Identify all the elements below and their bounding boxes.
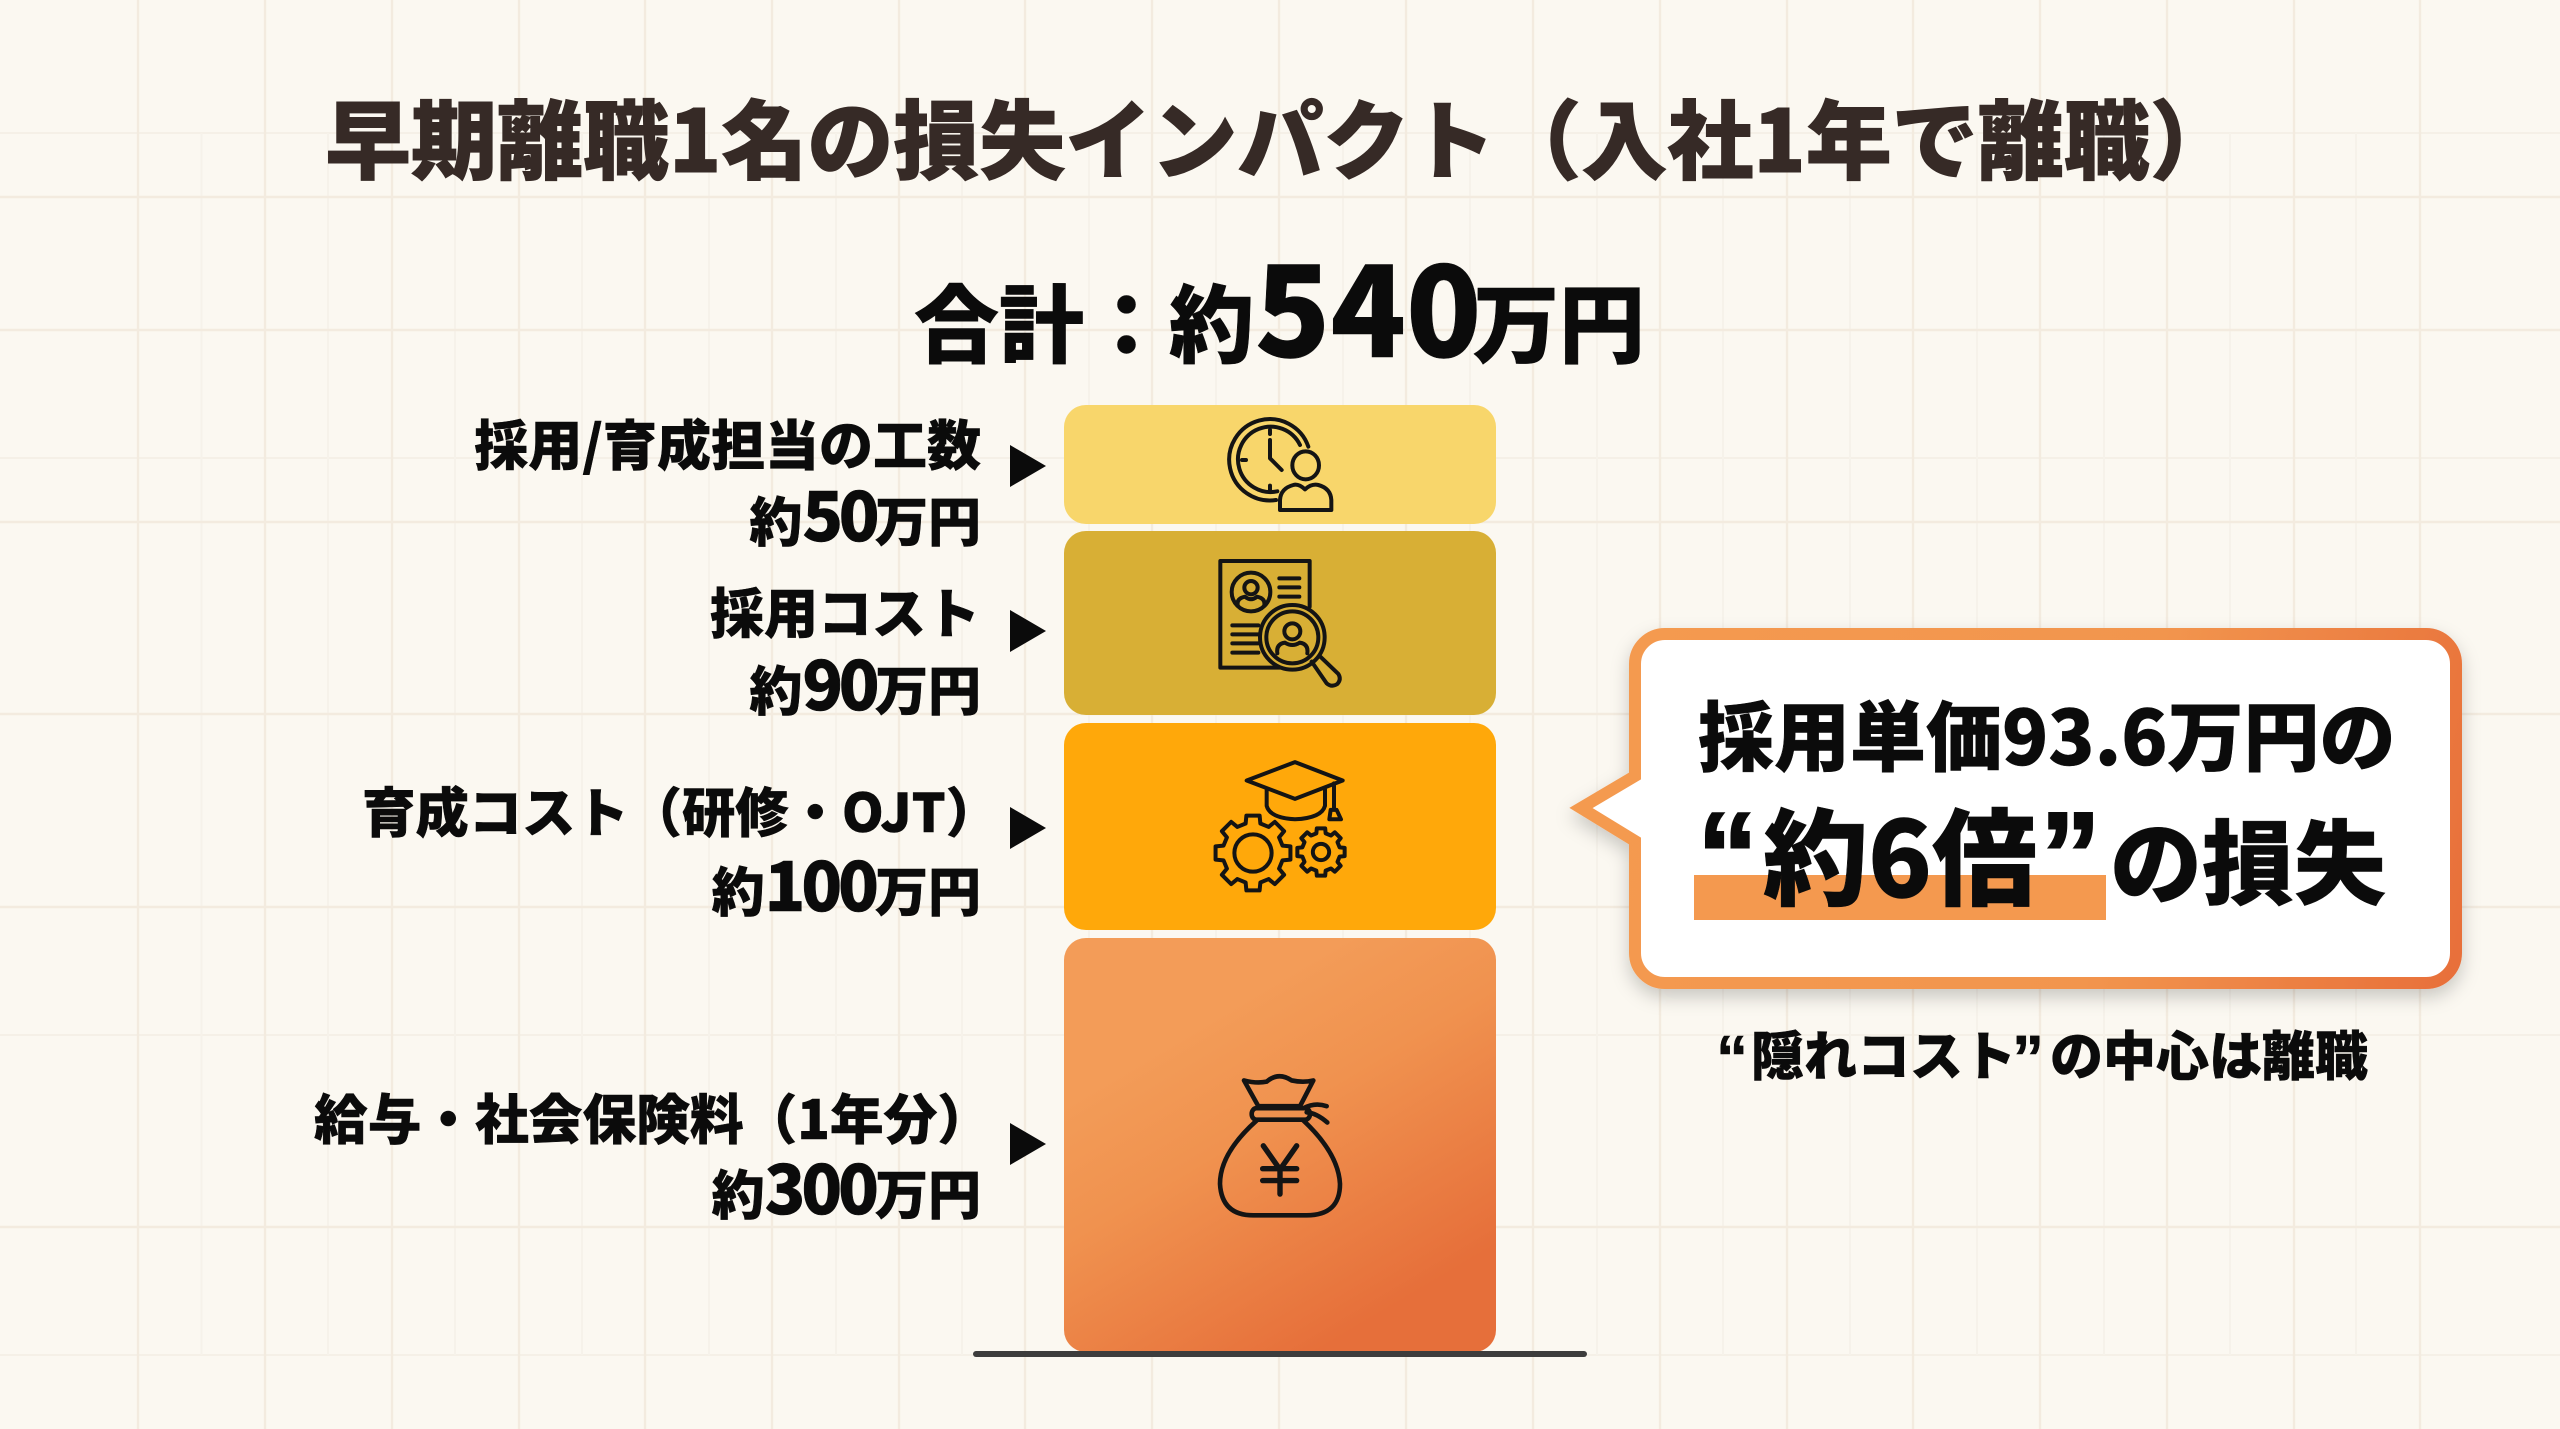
label: salary and social insurance [314,1078,991,1234]
label: recruiting staff workload: 約50万円 [749,464,981,561]
highlight bar [1694,875,2106,920]
total heading: 540 [1255,213,1482,393]
icon: money bag with yen [1220,1076,1340,1215]
icon: clock and person [1229,419,1331,510]
arrow: salary [1010,1123,1046,1165]
stacked bar segment: workload [1064,405,1496,524]
label: salary and social insurance: 約300万円 [712,1137,981,1234]
icon: resume and magnifier [1220,561,1340,686]
callout [1581,634,2456,983]
callout line 2: “ [1697,787,1758,923]
callout line 2: ” [2040,787,2101,923]
baseline [973,1351,1587,1357]
arrow: recruiting cost [1010,610,1046,652]
caption: の中心は離職 [2050,1015,2368,1091]
callout line 2: 約6倍 [1763,776,2037,928]
label: recruiting cost: 約90万円 [749,633,981,730]
label: training cost [362,771,999,931]
arrow: workload [1010,445,1046,487]
caption: ” [2012,1022,2044,1094]
label: recruiting staff workload: 採用/育成担当の工数 [474,402,981,481]
icon: graduation cap and gears [1216,762,1345,890]
label: training cost: 育成コスト（研修・OJT） [362,771,999,848]
stacked bar segment: salary [1064,938,1496,1352]
callout line 2: の損失 [2110,791,2386,924]
speech bubble [1581,634,2456,983]
label: salary and social insurance: 給与・社会保険料（1年分） [314,1078,991,1155]
label: recruiting cost [710,570,981,730]
total heading: 合計：約 [914,258,1254,381]
caption: “ [1716,1022,1748,1094]
total heading: 万円 [1473,256,1645,381]
title: 早期離職1名の損失インパクト（入社1年で離職） [325,72,2236,197]
label: recruiting cost: 採用コスト [710,570,980,649]
label: training cost: 約100万円 [712,834,981,931]
stacked bar segment: recruiting cost [1064,531,1496,715]
caption: 隠れコスト [1751,1015,2016,1091]
callout line 1: 採用単価93.6万円の [1698,677,2396,787]
arrow: training cost [1010,807,1046,849]
label: recruiting staff workload [474,402,981,561]
stacked bar segment: training cost [1064,723,1496,930]
